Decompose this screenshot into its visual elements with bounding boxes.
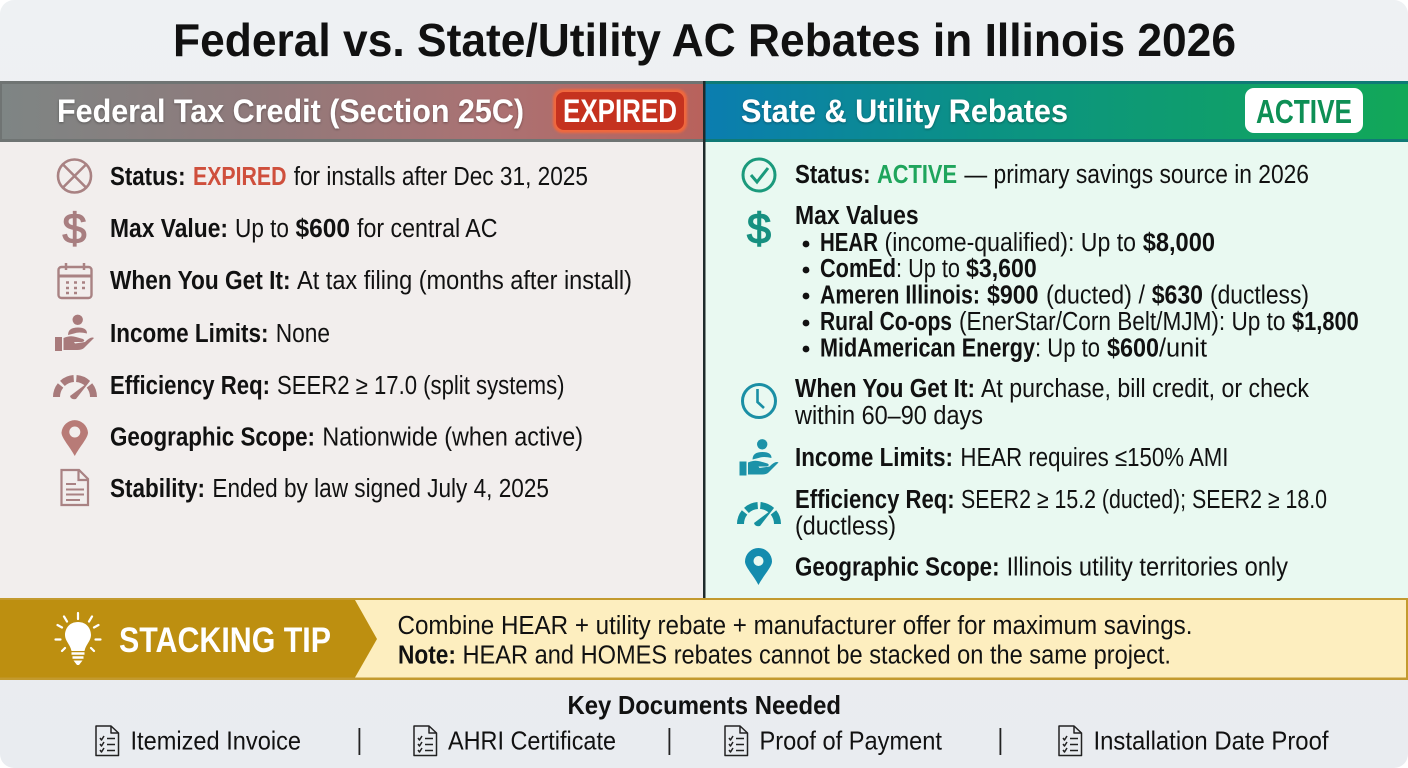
badge: expired <box>553 89 687 133</box>
row: efficiency: SEER2 ≥ 15.2 (ducted); SEER2 ≥ 18.0 <box>961 486 1327 514</box>
list item: MidAmerican: MidAmerican Energy <box>820 334 1036 362</box>
row: status: Status: <box>110 163 186 191</box>
icon: hand with person <box>55 315 94 351</box>
list item: Ameren: (ductless) <box>1210 282 1309 310</box>
row: stability <box>110 475 549 503</box>
row: geographic scope <box>795 554 1288 582</box>
icon: calendar <box>58 263 92 298</box>
row: stability: Ended by law signed July 4, 2025 <box>212 475 549 503</box>
row: efficiency: Efficiency Req: <box>795 486 955 514</box>
list item: rural co-ops: $1,800 <box>1292 308 1359 336</box>
document: installation date proof: Installation Date Proof <box>1094 726 1329 756</box>
row: efficiency: (ductless) <box>795 512 896 540</box>
row: income limits <box>795 444 1228 472</box>
list item: MidAmerican: /unit <box>1159 334 1207 362</box>
list item: Ameren: (ducted) / <box>1046 282 1146 310</box>
row: max value: $600 <box>296 215 350 243</box>
row: when you get it: When You Get It: <box>110 267 290 295</box>
list item: MidAmerican: : Up to <box>1035 334 1100 362</box>
list item: ComEd <box>803 255 1037 283</box>
row: geographic scope: Geographic Scope: <box>110 424 315 452</box>
row: income limits: None <box>276 320 330 348</box>
row: efficiency: Efficiency Req: <box>110 372 270 400</box>
row: income limits: HEAR requires ≤150% AMI <box>960 444 1228 472</box>
row: status <box>795 161 1309 189</box>
document: proof of payment: Proof of Payment <box>760 726 943 756</box>
list item: rural co-ops <box>803 308 1359 336</box>
icon: efficiency gauge <box>740 506 778 526</box>
gold arrow label: STACKING TIP <box>119 621 331 660</box>
row: geographic scope <box>110 424 583 452</box>
list item: HEAR: HEAR <box>820 229 878 257</box>
list item: HEAR: (income-qualified): Up to <box>884 229 1136 257</box>
icon: location pin <box>745 548 772 585</box>
row: efficiency <box>795 486 1327 540</box>
row: geographic scope: Geographic Scope: <box>795 554 1000 582</box>
icon: dollar: $ <box>62 205 87 253</box>
list item: ComEd: : Up to <box>896 255 960 283</box>
row: geographic scope: Nationwide (when active) <box>322 424 583 452</box>
key documents section <box>96 690 1329 756</box>
badge: active: ACTIVE <box>1256 93 1352 130</box>
document: itemized invoice: Itemized Invoice <box>130 726 301 756</box>
documents heading: Key Documents Needed <box>568 690 841 720</box>
row: stability: Stability: <box>110 475 205 503</box>
icon: efficiency gauge <box>56 378 94 399</box>
tip text: HEAR and HOMES rebates cannot be stacked on the same project. <box>462 642 1171 670</box>
row: status: EXPIRED <box>193 163 286 191</box>
icon: dollar: $ <box>747 205 771 253</box>
row: when you get it <box>110 267 632 295</box>
row: efficiency <box>110 372 564 400</box>
federal header bar: Federal Tax Credit (Section 25C) <box>57 93 524 129</box>
icon: hand with person <box>740 439 778 476</box>
state header bar: State & Utility Rebates <box>741 93 1068 129</box>
list item: Ameren: $900 <box>987 282 1038 310</box>
tip text <box>398 612 1192 670</box>
badge: expired: EXPIRED <box>563 93 677 129</box>
icon: document <box>62 470 88 505</box>
row: status: for installs after Dec 31, 2025 <box>294 163 588 191</box>
list item: Ameren: Ameren Illinois: <box>820 282 980 310</box>
list item: ComEd: ComEd <box>820 255 896 283</box>
row: geographic scope: Illinois utility territories only <box>1007 554 1288 582</box>
row: max value: Max Value: <box>110 215 228 243</box>
list item: Ameren: $630 <box>1152 282 1203 310</box>
block: max values list <box>795 202 1359 362</box>
icon: clock <box>742 384 776 418</box>
panel: federal tax credit <box>0 81 703 598</box>
row: max value: Up to <box>235 215 289 243</box>
row: efficiency: SEER2 ≥ 17.0 (split systems) <box>277 372 564 400</box>
document: AHRI certificate: AHRI Certificate <box>448 726 616 756</box>
list item: HEAR <box>803 229 1215 257</box>
list item: HEAR: $8,000 <box>1143 229 1215 257</box>
row: status: — primary savings source in 2026 <box>964 161 1309 189</box>
icon: light bulb <box>56 613 100 665</box>
tip text: Note: <box>398 642 456 670</box>
row: when you get it: At purchase, bill credit, or check <box>981 375 1309 403</box>
icon: expired x circle <box>58 160 91 192</box>
icon: location pin <box>62 420 88 456</box>
tip text: Combine HEAR + utility rebate + manufacturer offer for maximum savings. <box>398 612 1192 640</box>
row: max value <box>110 215 498 243</box>
icon: check circle <box>743 159 775 191</box>
state header bar <box>705 81 1408 142</box>
federal header bar <box>0 81 703 142</box>
panel: state and utility rebates <box>705 81 1408 598</box>
row: max value: for central AC <box>357 215 498 243</box>
row: status: Status: <box>795 161 871 189</box>
list item: ComEd: $3,600 <box>966 255 1037 283</box>
block: max values list: Max Values <box>795 202 919 230</box>
stacking tip banner <box>0 598 1408 680</box>
list item: MidAmerican <box>803 334 1207 362</box>
badge: active <box>1245 88 1363 133</box>
list item: rural co-ops: Rural Co-ops <box>820 308 952 336</box>
gold arrow label <box>0 600 377 678</box>
row: income limits: Income Limits: <box>795 444 953 472</box>
list item: MidAmerican: $600 <box>1107 334 1159 362</box>
row: when you get it: At tax filing (months after install) <box>297 267 632 295</box>
row: when you get it <box>794 375 1309 430</box>
row: when you get it: within 60–90 days <box>794 402 983 430</box>
row: status: ACTIVE <box>877 161 957 189</box>
title: Federal vs. State/Utility AC Rebates in Illinois 2026 <box>173 14 1236 66</box>
row: status <box>110 163 588 191</box>
list item: Ameren <box>803 282 1309 310</box>
list item: rural co-ops: (EnerStar/Corn Belt/MJM): Up to <box>959 308 1286 336</box>
row: income limits: Income Limits: <box>110 320 268 348</box>
row: when you get it: When You Get It: <box>795 375 975 403</box>
